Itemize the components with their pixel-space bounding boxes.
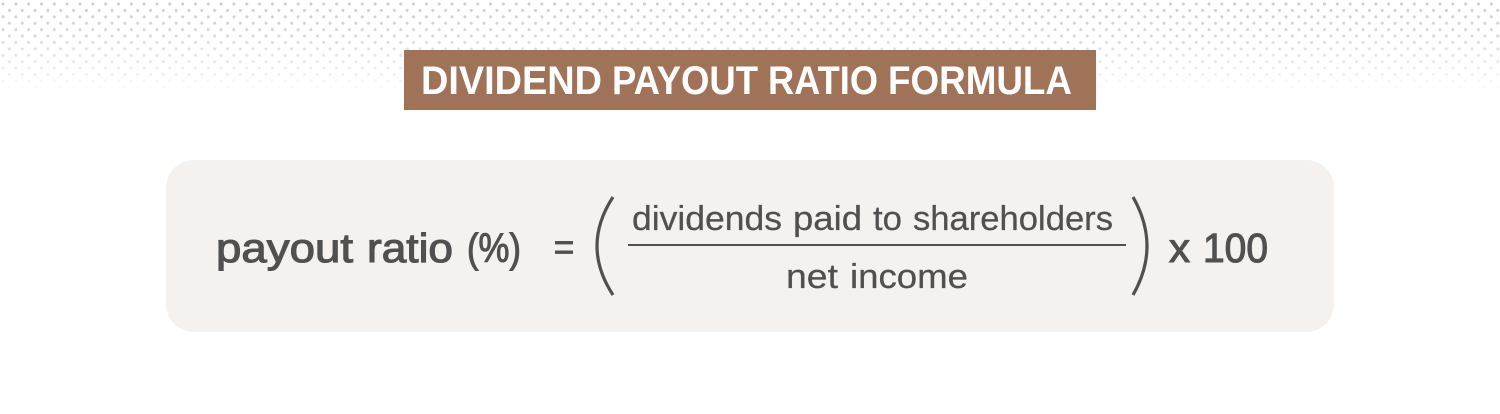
equals sign (555, 241, 573, 254)
denominator (786, 258, 968, 296)
numerator: shareholders (913, 200, 1113, 238)
numerator: to (873, 200, 902, 238)
title: DIVIDEND (421, 59, 602, 103)
title: PAYOUT (612, 59, 758, 103)
numerator: paid (793, 200, 862, 238)
title (404, 50, 1096, 110)
right bracket (1133, 197, 1147, 295)
denominator: income (850, 258, 968, 296)
label: payout ratio: (%) (467, 225, 521, 271)
label: payout ratio: ratio (367, 225, 453, 271)
label: payout ratio: payout (216, 225, 354, 271)
numerator (632, 200, 1113, 238)
multiplier: 100 (1203, 225, 1268, 271)
multiplier (1169, 225, 1268, 271)
left bracket (597, 197, 613, 295)
denominator: net (786, 258, 839, 296)
title: FORMULA (888, 59, 1072, 103)
panel: formula (166, 160, 1334, 332)
numerator: dividends (632, 200, 782, 238)
label: payout ratio (216, 225, 521, 271)
title: RATIO (768, 59, 878, 103)
multiplier: x (1169, 225, 1191, 271)
fraction line (628, 244, 1126, 246)
